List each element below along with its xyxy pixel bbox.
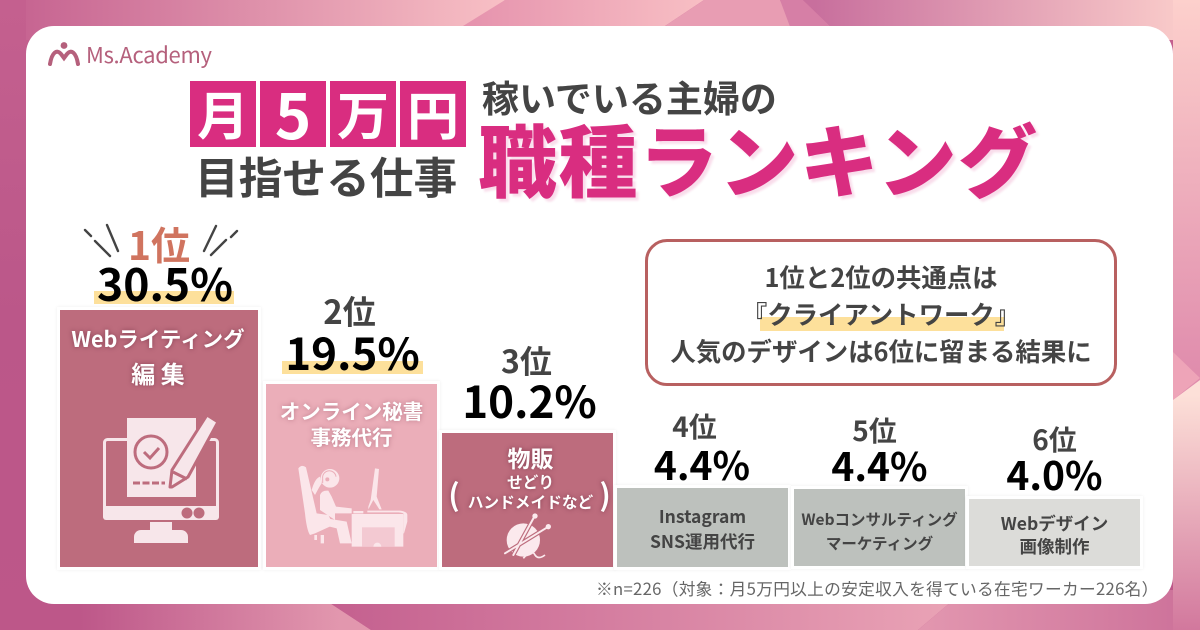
bar 3 sub label [468, 470, 593, 513]
bar 2 label: オンライン秘書 [280, 395, 423, 425]
bar 1 label [70, 323, 245, 390]
rank 4 label: 4位 [672, 406, 717, 446]
rank 6 label: 6位 [1032, 419, 1077, 459]
rank 1 sparkle lines [84, 224, 238, 258]
rank 1 percent: 30.5% [97, 249, 233, 314]
rank 1 highlight [94, 291, 234, 304]
bar 5 label: Webコンサルティング [801, 508, 958, 530]
callout text [670, 259, 1092, 369]
bar 6 label: 画像制作 [1020, 534, 1090, 559]
bar 3 sub label: せどり [507, 470, 554, 493]
rank 3 label: 3位 [501, 337, 552, 383]
title: monthly 50,000 yen boxes: 円 [407, 75, 459, 150]
footnote: ※n=226（対象：月5万円以上の安定収入を得ている在宅ワーカー226名） [596, 576, 1159, 600]
bar: rank 2 [266, 384, 437, 567]
title: monthly 50,000 yen boxes: 月 [197, 75, 249, 150]
bar 5 label [801, 508, 958, 554]
callout [645, 239, 1117, 386]
bar: rank 1 [60, 310, 258, 567]
bar 5 label: マーケティング [826, 532, 933, 554]
icon: woman at desk with headset [298, 466, 408, 547]
logo text: Ms.Academy [86, 38, 212, 70]
bar 4 label: Instagram [659, 504, 746, 529]
title: monthly 50,000 yen boxes: 5 [275, 67, 311, 157]
bar: rank 6 [969, 499, 1140, 566]
rank 1 label: 1位 [128, 216, 190, 272]
callout text: 1位と2位の共通点は [764, 259, 998, 295]
bar 2 label: 事務代行 [310, 421, 392, 451]
rank 6 percent: 4.0% [1006, 446, 1103, 502]
rank 3 percent: 10.2% [462, 367, 597, 431]
bar 6 label: Webデザイン [1001, 511, 1108, 536]
callout text: 人気のデザインは6位に留まる結果に [670, 333, 1092, 369]
bar: rank 4 [617, 488, 788, 567]
bar 3 label: 物販 [508, 440, 554, 474]
bar 2 label [280, 395, 424, 451]
rank 2 percent: 19.5% [285, 319, 420, 383]
left parenthesis: ( [448, 471, 460, 515]
rank 2 highlight [282, 361, 423, 374]
subtitle: jobs to aim for: 目指せる仕事 [195, 143, 457, 207]
icon: logo mark [48, 42, 80, 66]
bar: rank 5 [794, 489, 965, 566]
bar 4 label [650, 504, 755, 554]
logo [48, 38, 212, 70]
title: monthly 50,000 yen boxes [190, 67, 466, 157]
heading: job ranking: 職種ランキング [478, 99, 1038, 214]
bar 1 label: 編 集 [131, 355, 185, 390]
callout text: 『クライアントワーク』 [742, 296, 1020, 332]
bar: rank 3 [442, 433, 613, 567]
bar 1 label: Webライティング [71, 323, 245, 354]
bar 3 sub label: ハンドメイドなど [468, 490, 593, 513]
icon: monitor with document and pen [103, 417, 219, 543]
bar 4 label: SNS運用代行 [650, 529, 755, 554]
bar 6 label [1001, 511, 1108, 559]
rank 5 percent: 4.4% [831, 437, 928, 493]
right parenthesis: ) [599, 471, 611, 515]
rank 5 label: 5位 [852, 410, 897, 450]
callout highlight [760, 317, 1004, 331]
title: monthly 50,000 yen boxes: 万 [337, 75, 389, 150]
icon: yarn and needles [504, 513, 551, 559]
rank 4 percent: 4.4% [654, 436, 750, 492]
rank 2 label: 2位 [323, 286, 376, 334]
heading: housewives earning: 稼いでいる主婦の [482, 69, 777, 123]
